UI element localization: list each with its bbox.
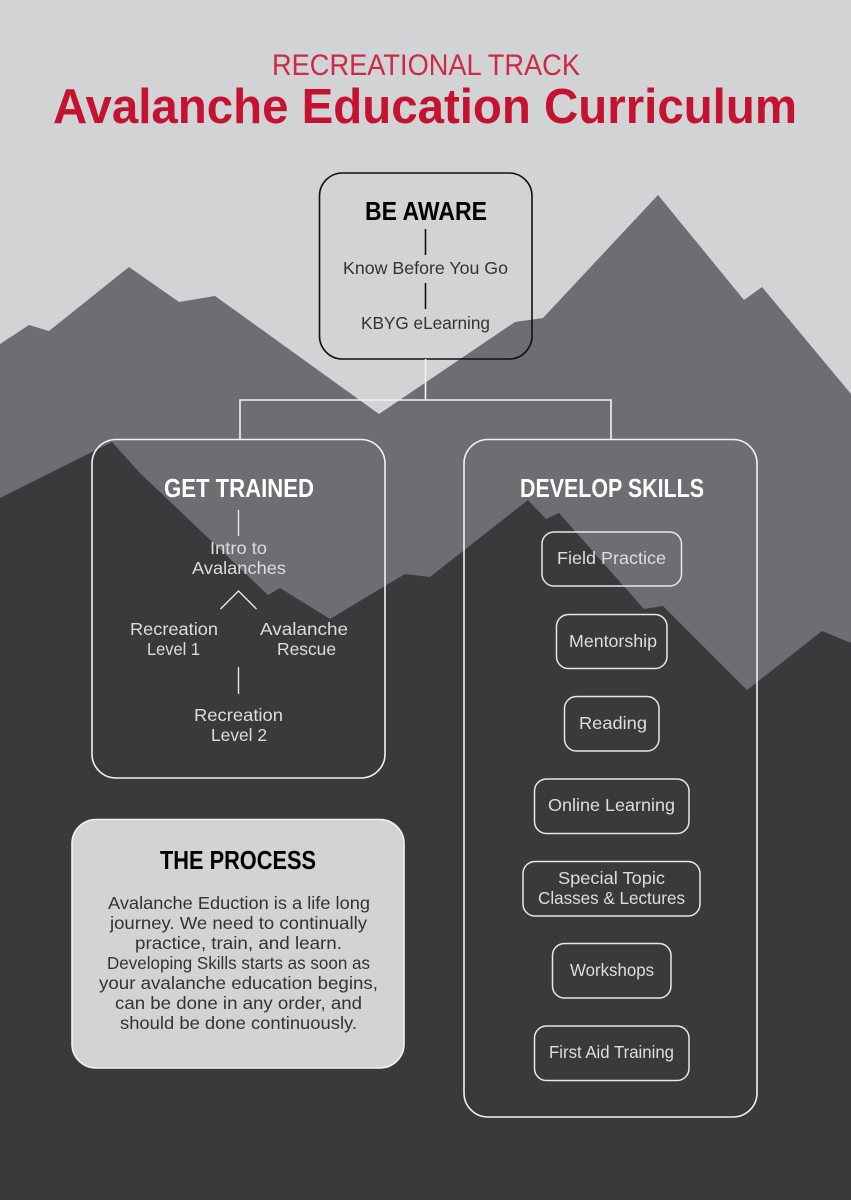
- subtitle: RECREATIONAL TRACK: [272, 49, 580, 82]
- main title: Avalanche Education Curriculum: [53, 80, 797, 134]
- pill: reading: [564, 696, 659, 751]
- heading: be aware: BE AWARE: [365, 196, 487, 226]
- panel: be aware: [320, 173, 532, 359]
- item: intro to avalanches: Avalanches: [192, 558, 286, 578]
- pill: mentorship: Mentorship: [569, 631, 657, 651]
- panel: get trained: [92, 440, 385, 778]
- background: near mountains: [0, 442, 851, 1200]
- pill: online learning: Online Learning: [548, 795, 675, 815]
- pill: mentorship: [556, 614, 667, 668]
- item: intro to avalanches: Intro to: [210, 538, 267, 558]
- pill: workshops: Workshops: [570, 960, 654, 980]
- item: avalanche rescue: Avalanche: [260, 619, 348, 639]
- body text: Avalanche Eduction is a life long: [108, 893, 370, 913]
- pill: field practice: Field Practice: [557, 548, 666, 568]
- connector line: [238, 510, 240, 536]
- connector line: [238, 667, 240, 694]
- body text: can be done in any order, and: [115, 993, 362, 1013]
- item: recreation level 2: Level 2: [211, 725, 267, 745]
- connector line: [424, 283, 426, 309]
- heading: get trained: GET TRAINED: [164, 473, 314, 503]
- title block: [53, 49, 797, 134]
- body text: journey. We need to continually: [109, 913, 367, 933]
- item: recreation level 1: [130, 619, 218, 659]
- body text: practice, train, and learn.: [135, 933, 342, 953]
- heading: develop skills: DEVELOP SKILLS: [520, 473, 704, 503]
- pill: special topic classes and lectures: [523, 862, 700, 916]
- item: kbyg elearning: KBYG eLearning: [361, 313, 490, 333]
- item: recreation level 2: Recreation: [194, 705, 283, 725]
- item: intro to avalanches: [192, 538, 286, 578]
- heading: the process: THE PROCESS: [160, 845, 316, 875]
- body text: your avalanche education begins,: [99, 973, 378, 993]
- item: recreation level 1: Recreation: [130, 619, 218, 639]
- connector: branch caret: [220, 591, 256, 609]
- item: know before you go: Know Before You Go: [343, 258, 508, 278]
- arrow: tree connector: [240, 359, 611, 440]
- pill: special topic classes and lectures: Classes & Lectures: [538, 888, 685, 908]
- pill: special topic classes and lectures: Special Topic: [558, 868, 665, 888]
- item: recreation level 2: [194, 705, 283, 745]
- pill: online learning: [534, 779, 689, 834]
- item: avalanche rescue: [260, 619, 348, 659]
- body text: should be done continuously.: [120, 1013, 357, 1033]
- item: recreation level 1: Level 1: [147, 639, 200, 659]
- item: avalanche rescue: Rescue: [277, 639, 336, 659]
- pill: first aid training: [534, 1026, 689, 1080]
- pill: reading: Reading: [579, 713, 647, 733]
- pill: first aid training: First Aid Training: [549, 1042, 674, 1062]
- panel: develop skills: [464, 440, 757, 1117]
- pill: field practice: [542, 532, 682, 586]
- connector line: [424, 229, 426, 255]
- body text: [99, 893, 378, 1033]
- panel: the process: [72, 820, 404, 1068]
- pill: workshops: [552, 944, 671, 998]
- body text: Developing Skills starts as soon as: [107, 953, 370, 973]
